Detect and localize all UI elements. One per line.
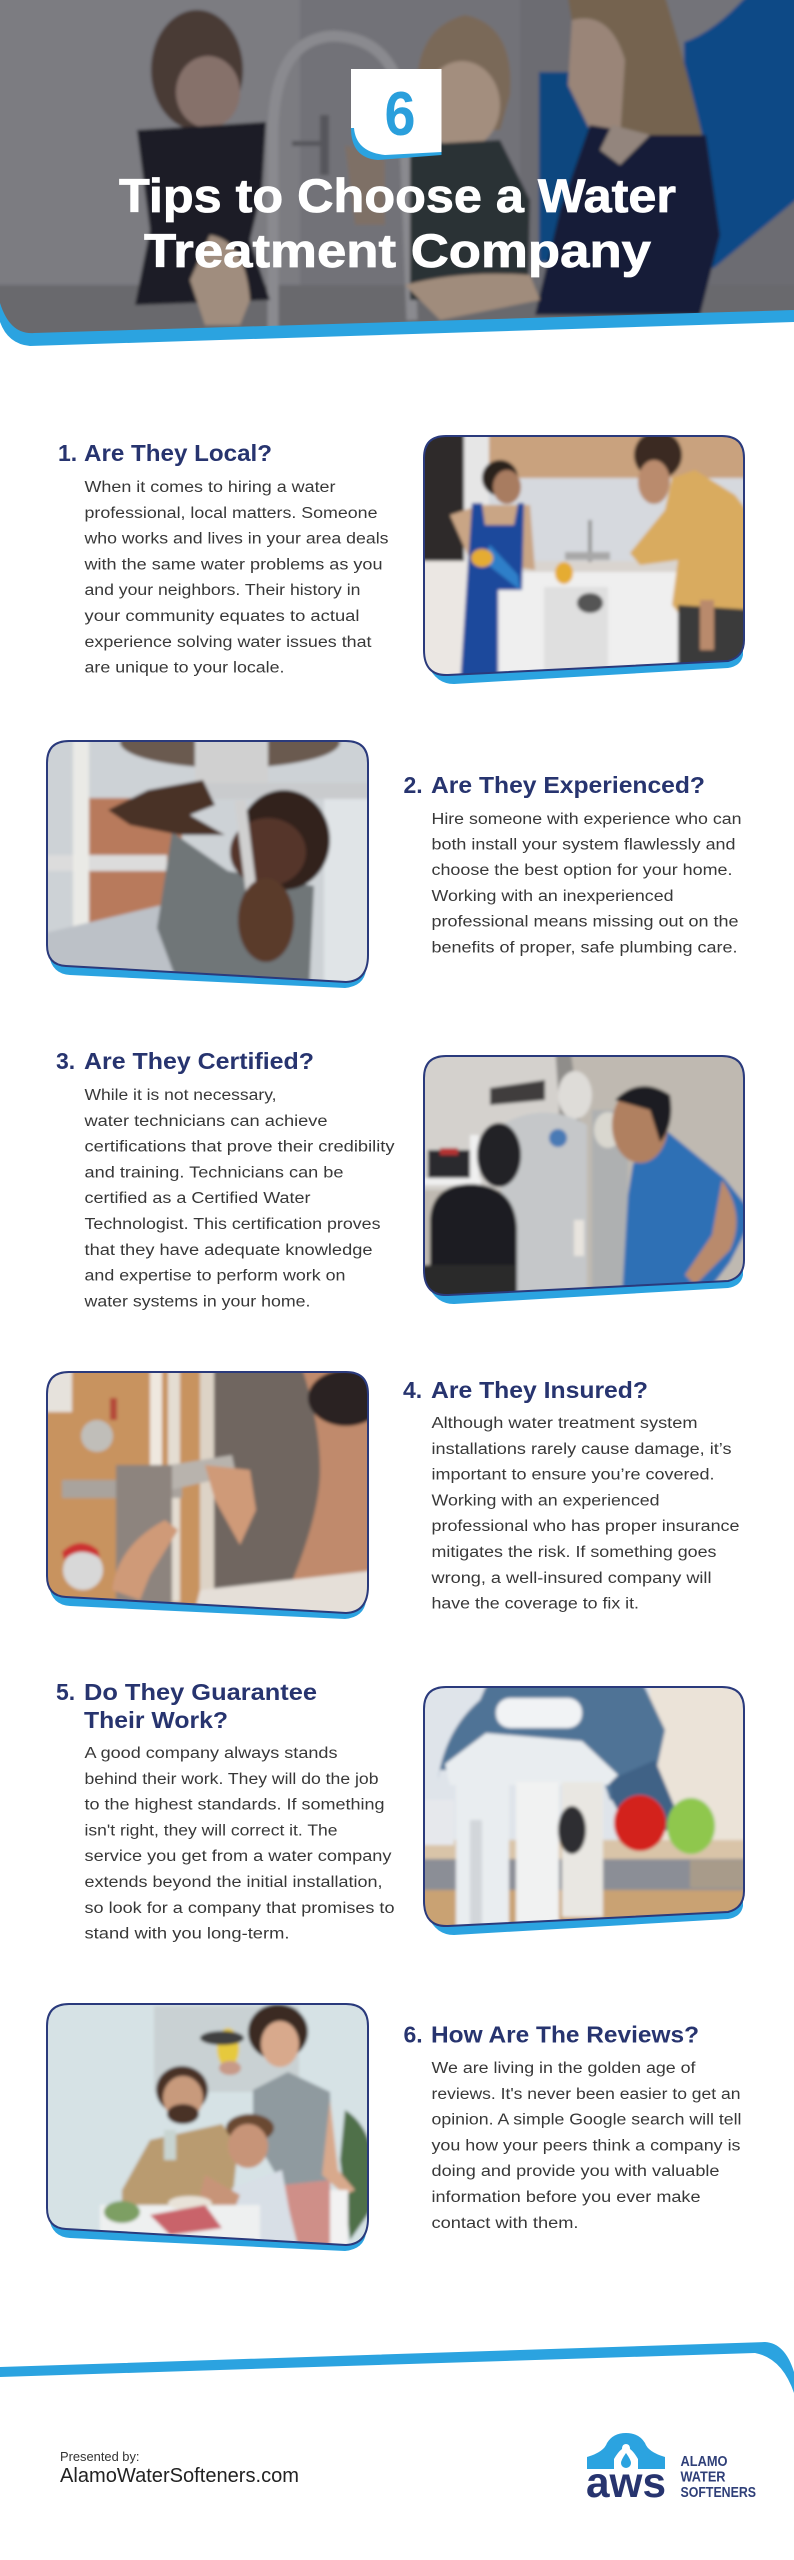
tip 3 heading: Are They Certified?: [84, 1048, 314, 1074]
tip 1 body text: experience solving water issues that: [84, 634, 372, 651]
tip 1 body text: [83, 479, 389, 676]
tip 2 body text: choose the best option for your home.: [432, 862, 732, 879]
tip 6 panel: [37, 1994, 742, 2264]
title: Tips to Choose a Water: [119, 169, 676, 222]
logo: Alamo Water Softeners: ALAMO: [680, 2454, 728, 2470]
footer presenter credit: Presented by:: [60, 2449, 140, 2464]
tip 5 body text: [84, 1745, 394, 1943]
tip 3 body text: While it is not necessary,: [84, 1087, 276, 1104]
tip 6 body text: opinion. A simple Google search will tell: [432, 2112, 742, 2129]
tip 1 heading: 1.: [58, 440, 77, 466]
footer presenter credit: AlamoWaterSofteners.com: [60, 2465, 299, 2487]
tip 3 body text: water technicians can achieve: [83, 1113, 328, 1130]
tip 4 body text: have the coverage to fix it.: [432, 1596, 639, 1613]
tip 6 body text: We are living in the golden age of: [432, 2060, 696, 2077]
tip 4 photo: hands installing pipe filter: [46, 1371, 369, 1619]
tip 4 body text: mitigates the risk. If something goes: [432, 1544, 717, 1561]
tip 4 body text: professional who has proper insurance: [432, 1518, 740, 1535]
badge: number 6: [351, 69, 442, 160]
tip 6 photo: happy family at table: [46, 2003, 369, 2251]
tip 5 heading: [56, 1679, 317, 1733]
tip 5 heading: Do They Guarantee: [84, 1679, 317, 1705]
tip 4 body text: wrong, a well-insured company will: [430, 1570, 712, 1587]
tip 3 photo: technician with water heater and softener: [423, 1055, 745, 1304]
tip 1 heading: Are They Local?: [84, 440, 272, 466]
tip 2 body text: professional means missing out on the: [432, 914, 738, 930]
tip 3 body text: certifications that prove their credibility: [84, 1139, 395, 1156]
tip 1 body text: your community equates to actual: [84, 608, 360, 625]
logo: Alamo Water Softeners: SOFTENERS: [680, 2485, 756, 2501]
tip 6 heading: 6.: [404, 2022, 423, 2048]
tip 4 body text: installations rarely cause damage, it’s: [432, 1441, 732, 1458]
tip 2 body text: [432, 811, 742, 956]
tip 4 body text: important to ensure you’re covered.: [432, 1467, 714, 1484]
title: [119, 169, 676, 277]
tip 5 body text: A good company always stands: [84, 1745, 338, 1762]
tip 3 body text: water systems in your home.: [83, 1293, 310, 1310]
tip 5 heading: 5.: [56, 1679, 75, 1705]
footer blue wave: [0, 2342, 794, 2393]
tip 1 body text: with the same water problems as you: [83, 556, 383, 574]
title: Treatment Company: [144, 224, 651, 277]
tip 1 body text: who works and lives in your area deals: [83, 530, 389, 548]
tip 5 heading: Their Work?: [84, 1707, 228, 1733]
tip 2 body text: benefits of proper, safe plumbing care.: [432, 940, 738, 956]
logo: Alamo Water Softeners: aws: [586, 2459, 666, 2507]
tip 6 body text: reviews. It's never been easier to get an: [432, 2086, 740, 2103]
logo: Alamo Water Softeners: [586, 2433, 756, 2507]
footer presenter credit: [60, 2449, 299, 2487]
badge: number 6: 6: [384, 80, 416, 149]
tip 1 body text: are unique to your locale.: [84, 660, 284, 676]
tip 6 body text: you how your peers think a company is: [432, 2137, 741, 2154]
tip 3 body text: and training. Technicians can be: [84, 1164, 344, 1181]
tip 1 photo: plumber and homeowner at sink: [423, 435, 745, 684]
tip 2 panel: [46, 740, 740, 988]
tip 4 body text: Although water treatment system: [432, 1415, 698, 1432]
tip 2 heading: 2.: [404, 772, 423, 798]
tip 2 body text: both install your system flawlessly and: [432, 836, 736, 854]
icon: alamo arch with water drop: [587, 2433, 665, 2469]
tip 6 body text: contact with them.: [432, 2215, 578, 2232]
tip 1 body text: When it comes to hiring a water: [84, 479, 336, 496]
tip 5 body text: to the highest standards. If something: [84, 1797, 384, 1814]
tip 5 body text: service you get from a water company: [84, 1848, 392, 1865]
logo: Alamo Water Softeners: WATER: [680, 2470, 726, 2486]
tip 5 body text: extends beyond the initial installation,: [84, 1874, 382, 1891]
tip 4 body text: [430, 1415, 740, 1613]
tip 4 heading: 4.: [403, 1377, 422, 1403]
tip 1 body text: professional, local matters. Someone: [84, 505, 378, 522]
header photo: family at kitchen faucet: [0, 0, 794, 360]
tip 6 body text: doing and provide you with valuable: [432, 2163, 720, 2180]
tip 3 body text: that they have adequate knowledge: [84, 1242, 372, 1259]
tip 4 heading: Are They Insured?: [431, 1377, 648, 1403]
tip 3 body text: certified as a Certified Water: [84, 1190, 310, 1207]
tip 1 panel: [58, 426, 754, 691]
tip 3 panel: [56, 1046, 754, 1311]
tip 2 heading: Are They Experienced?: [431, 772, 705, 798]
tip 5 photo: reverse osmosis filter system: [423, 1686, 745, 1935]
tip 2 body text: Working with an inexperienced: [432, 888, 674, 905]
tip 5 body text: stand with you long-term.: [84, 1926, 290, 1943]
tip 3 heading: 3.: [56, 1048, 75, 1074]
tip 5 body text: isn't right, they will correct it. The: [84, 1822, 338, 1839]
tip 3 body text: and expertise to perform work on: [84, 1268, 346, 1285]
tip 6 heading: How Are The Reviews?: [431, 2022, 699, 2048]
tip 2 body text: Hire someone with experience who can: [432, 811, 742, 828]
tip 5 panel: [56, 1677, 754, 1943]
tip 3 body text: Technologist. This certification proves: [84, 1216, 381, 1233]
tip 4 body text: Working with an experienced: [432, 1492, 660, 1509]
tip 1 body text: and your neighbors. Their history in: [84, 582, 360, 599]
tip 6 body text: information before you ever make: [432, 2189, 700, 2206]
tip 2 photo: plumber with wrench under sink: [46, 740, 369, 988]
tip 6 body text: [432, 2060, 742, 2232]
tip 5 body text: behind their work. They will do the job: [84, 1771, 378, 1788]
tip 4 panel: [37, 1362, 740, 1630]
header blue wave: [0, 298, 794, 346]
tip 3 body text: [83, 1087, 395, 1310]
tip 5 body text: so look for a company that promises to: [84, 1900, 394, 1917]
header banner: [0, 0, 794, 360]
